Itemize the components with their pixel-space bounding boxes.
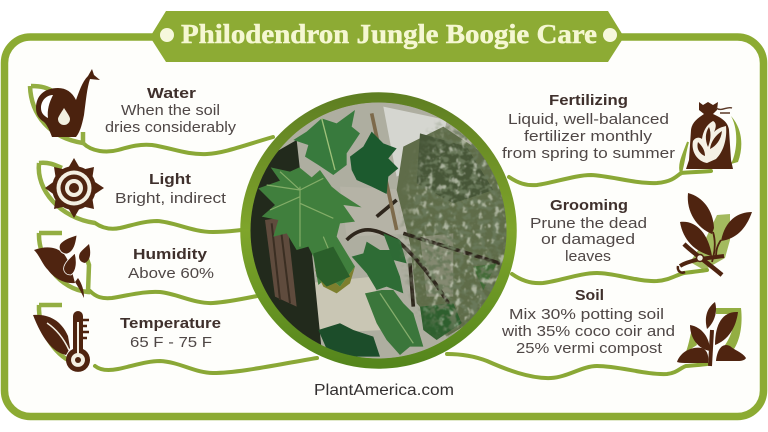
light text: Bright, indirect — [115, 190, 227, 207]
grooming text: Grooming — [550, 197, 628, 214]
fertilizing text — [502, 92, 675, 162]
trunk — [247, 140, 322, 350]
title banner — [150, 11, 624, 62]
fertilizing text: from spring to summer — [502, 145, 675, 162]
item: humidity — [34, 233, 214, 298]
soil text — [501, 287, 675, 357]
central photo of philodendron — [240, 90, 520, 370]
water text: When the soil — [121, 102, 220, 119]
grooming text — [530, 197, 647, 265]
icon: watering can — [30, 69, 100, 143]
temperature text: 65 F - 75 F — [130, 334, 212, 351]
item: soil — [501, 287, 746, 366]
grooming text: or damaged — [541, 231, 635, 248]
item: fertilizing — [502, 92, 741, 173]
humidity text: Humidity — [133, 246, 208, 263]
soil text: 25% vermi compost — [516, 340, 663, 357]
item: temperature — [33, 305, 221, 372]
lower leaves — [352, 242, 403, 293]
item: light — [39, 158, 227, 223]
photo background and foliage — [250, 102, 506, 358]
temperature text — [120, 315, 221, 351]
fine foliage mass — [397, 127, 507, 337]
light text: Light — [149, 171, 191, 188]
humidity text: Above 60% — [128, 265, 214, 282]
top centre leaf — [350, 132, 398, 194]
fertilizing text: Liquid, well-balanced — [508, 111, 669, 128]
foliage speckle layers — [399, 120, 506, 338]
water text: Water — [147, 85, 196, 102]
upper left leaf — [293, 110, 360, 175]
water text — [105, 85, 237, 136]
water text: dries considerably — [105, 119, 237, 136]
icon: sun — [39, 158, 104, 223]
branches — [347, 200, 500, 323]
item: grooming — [530, 193, 752, 275]
icon: leaf with droplets — [34, 233, 90, 298]
temperature text: Temperature — [120, 315, 221, 332]
fertilizing text: Fertilizing — [549, 92, 628, 109]
fertilizing text: fertilizer monthly — [524, 128, 653, 145]
soil text: Mix 30% potting soil — [509, 306, 664, 323]
grooming text: Prune the dead — [530, 215, 647, 232]
humidity text — [128, 246, 214, 282]
icon: fertilizer bag — [680, 102, 741, 173]
big leaf — [258, 167, 362, 287]
grooming text: leaves — [565, 248, 611, 265]
icon: leaves and pruning shears — [678, 193, 752, 275]
soil text: with 35% coco coir and — [501, 323, 675, 340]
icon: sprout in soil — [677, 302, 746, 366]
soil text: Soil — [575, 287, 604, 304]
vine connectors — [83, 137, 711, 378]
icon: leaf and thermometer — [33, 305, 90, 372]
title: Philodendron Jungle Boogie Care — [181, 19, 597, 49]
light text — [115, 171, 227, 207]
website credit: PlantAmerica.com — [314, 382, 454, 399]
item: water — [30, 69, 237, 143]
